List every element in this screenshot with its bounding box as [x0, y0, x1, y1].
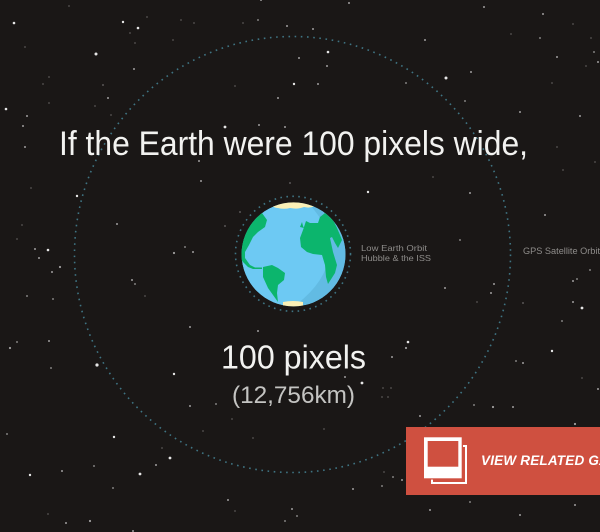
icon: photos [423, 436, 466, 483]
ocean [242, 202, 346, 306]
polar cap south [283, 301, 303, 306]
continent: south america [263, 265, 285, 302]
label: gps satellite orbit: GPS Satellite Orbit [523, 246, 600, 256]
label: low earth orbit: Hubble & the ISS [361, 253, 431, 263]
label: low earth orbit [361, 243, 431, 263]
polar cap north [273, 202, 314, 209]
continent: island [300, 222, 304, 228]
icon: earth [242, 202, 346, 306]
GPS satellite orbit ring [74, 36, 510, 472]
ocean shade [300, 205, 346, 306]
title: If the Earth were 100 pixels wide, [59, 125, 528, 163]
continent: north america [242, 213, 267, 269]
caption: 12,756km: (12,756km) [232, 382, 355, 409]
low earth orbit ring [236, 196, 350, 311]
caption: 100 pixels: 100 pixels [221, 338, 366, 376]
continent: africa and europe [300, 213, 342, 284]
label: low earth orbit: Low Earth Orbit [361, 243, 428, 253]
button: view related gallery [406, 427, 600, 495]
